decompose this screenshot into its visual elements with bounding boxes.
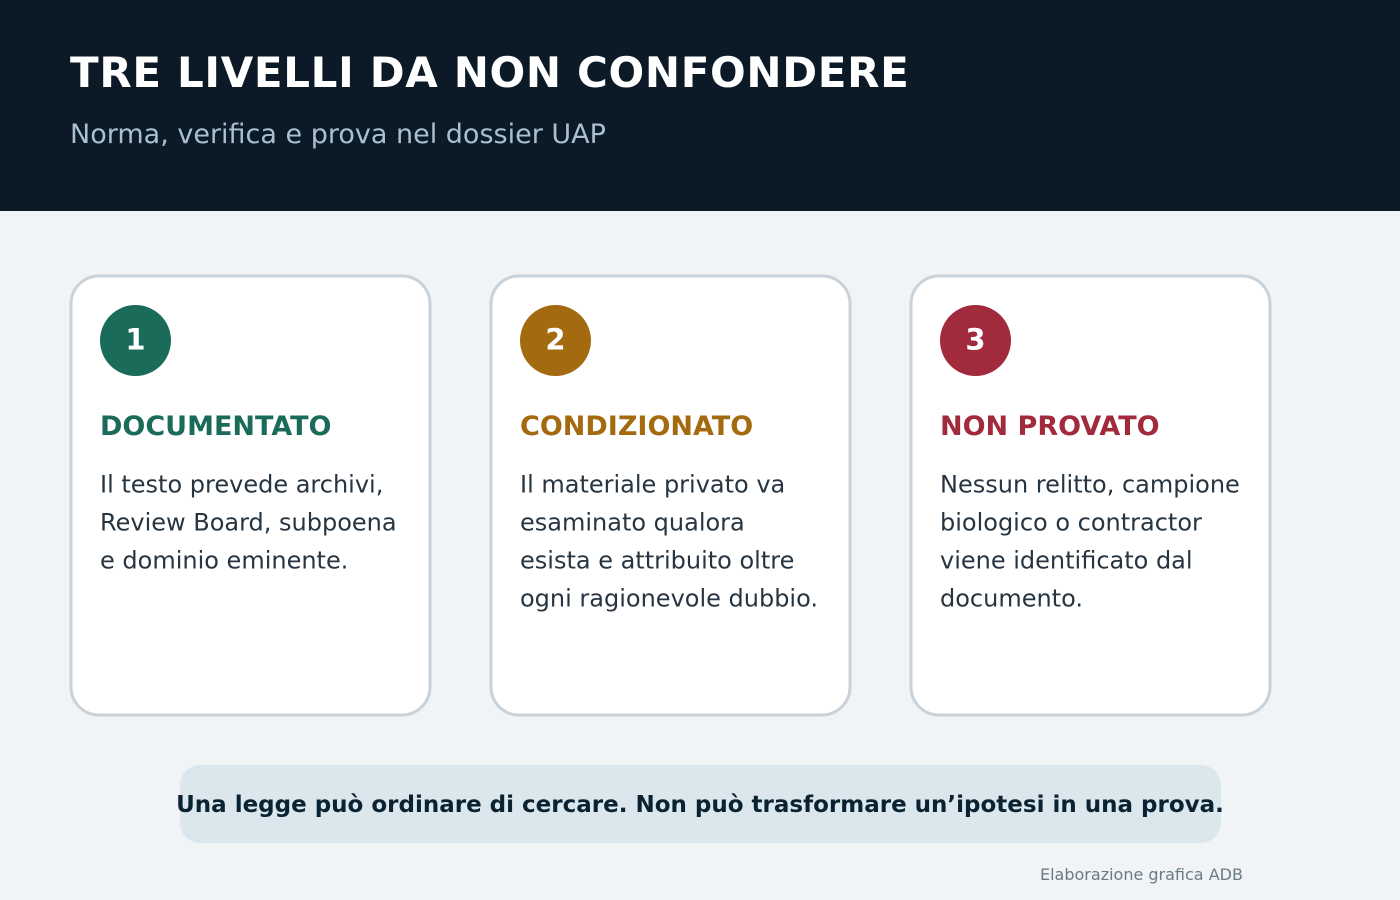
text block: non provato: biologico o contractor <box>940 508 1202 536</box>
text block: condizionato: ogni ragionevole dubbio. <box>520 584 818 612</box>
header band <box>0 0 1400 211</box>
panel: condizionato <box>491 276 850 715</box>
text block: non provato: viene identificato dal <box>940 546 1193 574</box>
text block: documentato: Review Board, subpoena <box>100 508 397 536</box>
heading: non provato: NON PROVATO <box>940 411 1160 442</box>
credit: Elaborazione grafica ADB <box>1040 865 1243 884</box>
callout: Una legge può ordinare di cercare. Non può trasformare un’ipotesi in una prova. <box>176 792 1224 818</box>
text block: documentato: e dominio eminente. <box>100 546 348 574</box>
text block: condizionato: Il materiale privato va <box>520 470 785 498</box>
text block: documentato <box>100 470 397 574</box>
subtitle: Norma, verifica e prova nel dossier UAP <box>70 119 606 150</box>
text block: non provato: documento. <box>940 584 1083 612</box>
text block: condizionato: esista e attribuito oltre <box>520 546 794 574</box>
heading: condizionato: CONDIZIONATO <box>520 411 753 442</box>
heading: documentato: DOCUMENTATO <box>100 411 332 442</box>
text block: non provato: Nessun relitto, campione <box>940 470 1240 498</box>
icon: number 1: 1 <box>125 322 146 356</box>
icon: number 2: 2 <box>545 322 566 356</box>
title: TRE LIVELLI DA NON CONFONDERE <box>70 48 910 97</box>
text block: documentato: Il testo prevede archivi, <box>100 470 383 498</box>
text block: condizionato: esaminato qualora <box>520 508 745 536</box>
text block: condizionato <box>520 470 818 612</box>
icon: number 1 <box>100 305 171 376</box>
panel: non provato <box>911 276 1270 715</box>
icon: number 2 <box>520 305 591 376</box>
text block: non provato <box>940 470 1240 612</box>
callout <box>176 765 1224 843</box>
icon: number 3 <box>940 305 1011 376</box>
panel: documentato <box>71 276 430 715</box>
icon: number 3: 3 <box>965 322 986 356</box>
